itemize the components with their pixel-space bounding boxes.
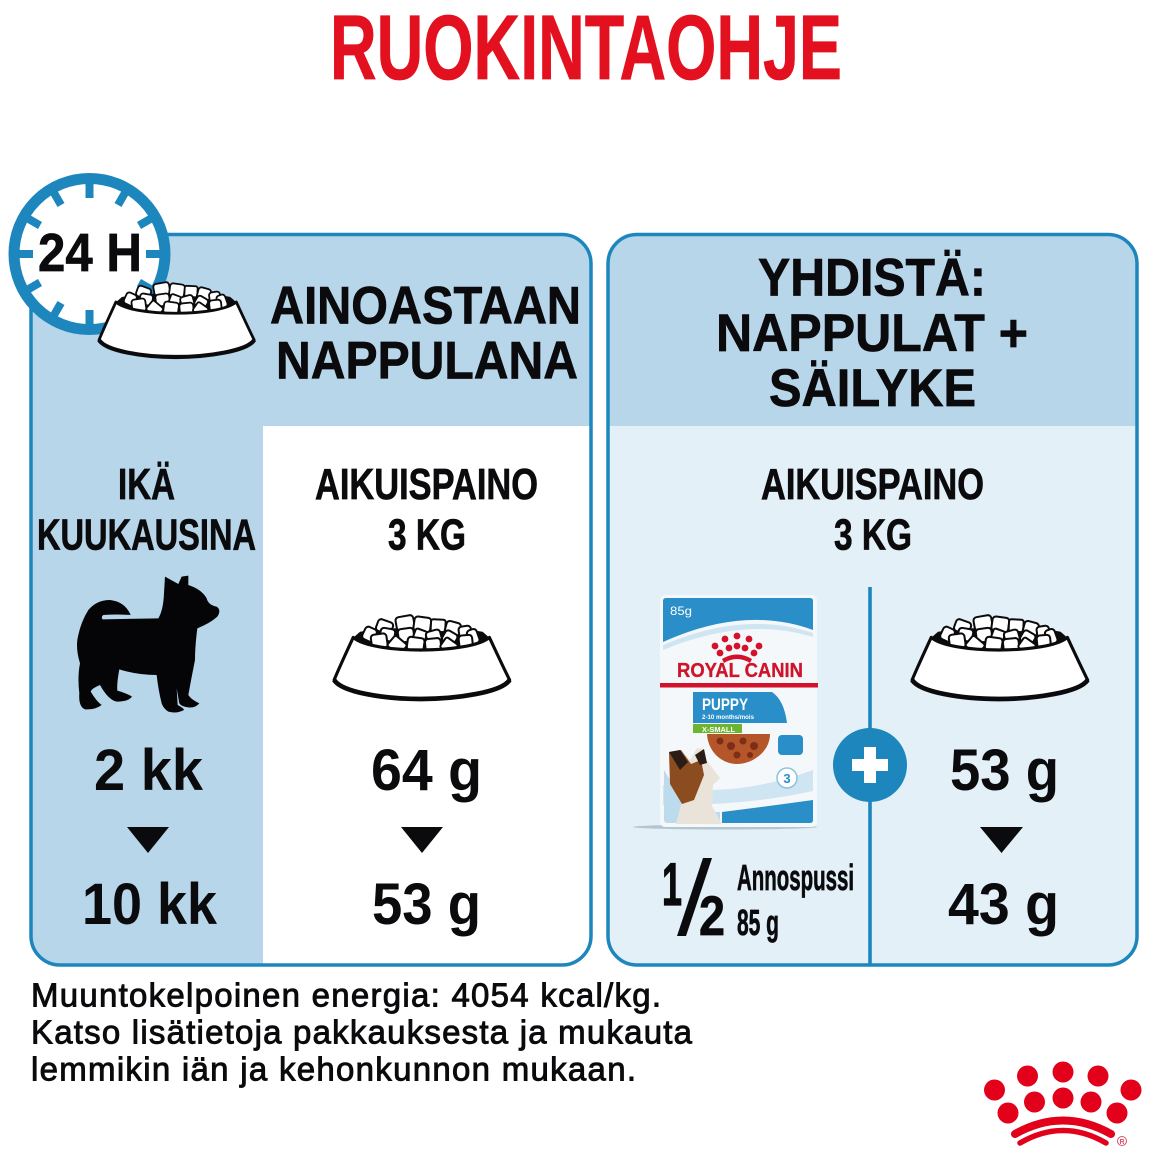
- column heading: age: KUUKAUSINA: [37, 510, 256, 560]
- arrow: age: [127, 827, 169, 853]
- column heading: adult weight: 3 KG: [388, 510, 466, 560]
- icon: food pouch: 85g: [670, 604, 692, 618]
- amount end: 53 g: [372, 872, 481, 937]
- pouch label: [737, 857, 854, 943]
- pouch label: 85 g: [737, 902, 779, 943]
- heading: combine: YHDISTÄ:: [758, 248, 986, 308]
- heading: kibble only: NAPPULANA: [276, 332, 578, 390]
- fraction: half pouch: [662, 851, 725, 947]
- heading: combine: SÄILYKE: [769, 359, 976, 418]
- column heading: adult weight: AIKUISPAINO: [761, 460, 984, 509]
- icon: kibble bowl: [912, 615, 1088, 699]
- column heading: adult weight: 3 KG: [834, 510, 912, 560]
- column heading: adult weight: [315, 460, 538, 560]
- icon: food pouch: 2-10 months/mois: [702, 714, 754, 721]
- icon: food pouch: [633, 595, 818, 830]
- logo: crown: [984, 1062, 1142, 1146]
- logo: crown: R: [1119, 1139, 1125, 1146]
- footnote: [31, 976, 693, 1088]
- title: RUOKINTAOHJE: [330, 0, 842, 99]
- pouch label: Annospussi: [737, 857, 854, 898]
- amount end: 43 g: [948, 872, 1059, 937]
- heading: kibble only: AINOASTAAN: [270, 276, 581, 336]
- heading: combine: [716, 248, 1028, 418]
- age end: 10 kk: [82, 872, 218, 937]
- arrow: amount: [980, 827, 1023, 853]
- panel: kibble only: [31, 234, 591, 965]
- heading: combine: NAPPULAT +: [716, 304, 1028, 363]
- column heading: adult weight: [761, 460, 984, 560]
- amount start: 64 g: [371, 738, 482, 803]
- icon: kibble bowl: [334, 615, 510, 699]
- icon: food pouch: ROYAL CANIN: [677, 660, 803, 682]
- fraction: half pouch: 2: [699, 884, 725, 947]
- column heading: adult weight: AIKUISPAINO: [315, 460, 538, 509]
- column heading: age: [37, 460, 256, 560]
- arrow: amount: [401, 827, 443, 853]
- icon: 24 h clock: 24 H: [38, 223, 142, 283]
- icon: plus: [833, 728, 907, 802]
- icon: kibble bowl: [99, 282, 254, 357]
- fraction: half pouch: 1: [662, 851, 682, 918]
- age start: 2 kk: [94, 738, 204, 803]
- amount start: 53 g: [950, 738, 1059, 803]
- icon: food pouch: PUPPY: [702, 695, 749, 714]
- footnote: Katso lisätietoja pakkauksesta ja mukauta: [31, 1014, 693, 1050]
- icon: food pouch: X-SMALL: [702, 725, 735, 734]
- icon: 24 h clock: [14, 178, 165, 330]
- heading: kibble only: [270, 276, 581, 390]
- panel: mixed feeding: [608, 234, 1137, 965]
- footnote: lemmikin iän ja kehonkunnon mukaan.: [31, 1050, 636, 1088]
- icon: dog silhouette: [77, 576, 219, 713]
- column heading: age: IKÄ: [118, 460, 175, 509]
- icon: food pouch: 3: [783, 771, 791, 786]
- footnote: Muuntokelpoinen energia: 4054 kcal/kg.: [31, 976, 661, 1014]
